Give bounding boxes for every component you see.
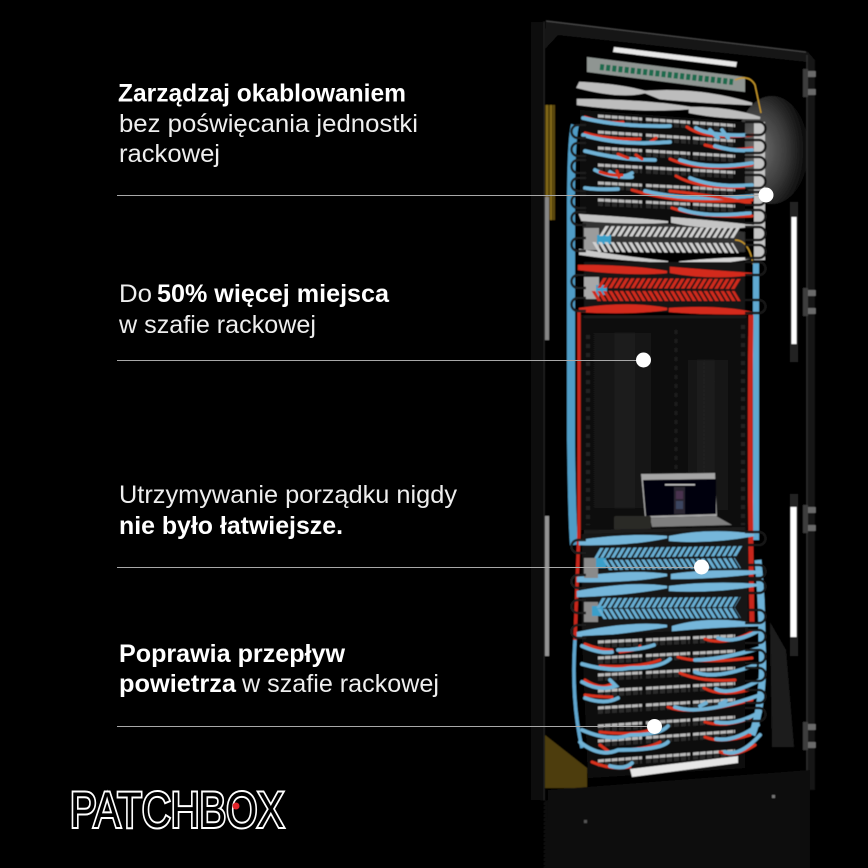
callout 2: more space (117, 280, 651, 368)
black patch panel bodies (580, 110, 745, 225)
yellow cables at back (544, 105, 587, 788)
blue flat bundles (578, 532, 762, 637)
blue cable fans (584, 551, 740, 622)
fibre patch panel (587, 57, 761, 113)
lower door glow (770, 622, 794, 747)
top light bar (613, 47, 737, 67)
text block: rackowej (119, 140, 220, 168)
text block: bez poświęcania jednostki (119, 110, 418, 138)
text block: w szafie rackowej (118, 311, 316, 339)
cabinet plinth (548, 770, 810, 868)
cabinet side panel (450, 20, 548, 868)
bottom light bar (630, 756, 738, 777)
blue bundle backing (582, 530, 748, 636)
text block: Do (119, 280, 152, 308)
text block: powietrza (119, 670, 237, 698)
right light tube lower (790, 494, 798, 656)
upper rack equipment (578, 57, 761, 313)
grey cable fans (580, 215, 755, 265)
tool on shelf (614, 516, 651, 530)
lower rack equipment (578, 530, 762, 778)
text block: 50% więcej miejsca (157, 280, 390, 308)
grey cable bundles (578, 83, 760, 118)
cabinet frame (531, 20, 815, 800)
white strip behind rings (754, 122, 765, 260)
port rows upper (598, 116, 735, 210)
right light tube upper (790, 202, 798, 362)
cable rings right side (745, 122, 766, 721)
callout 3: easy order (117, 481, 709, 574)
empty rack space (581, 315, 747, 530)
logo red dot (232, 802, 240, 810)
text block: Zarządzaj okablowaniem (118, 80, 406, 108)
cabinet interior (545, 22, 810, 800)
door hinges (803, 69, 816, 750)
black lower panel body (582, 628, 745, 778)
callout 1: cable management (117, 80, 774, 202)
callout 4: airflow (117, 640, 662, 734)
vertical cable bundles (571, 125, 763, 748)
text block: Poprawia przepływ (119, 640, 346, 668)
red cable fans (579, 262, 752, 313)
logo: PATCHBOX: PATCHBOX (70, 782, 284, 838)
left light tubes (544, 197, 549, 656)
shelf (584, 527, 745, 535)
port rows lower (598, 636, 735, 765)
text block: nie było łatwiejsze. (119, 512, 343, 540)
server rack cabinet (450, 20, 816, 868)
patch cords upper (583, 117, 753, 216)
text block: Utrzymywanie porządku nigdy (119, 481, 457, 509)
door glow (736, 96, 808, 204)
cable rings left side (572, 125, 586, 638)
patch cords lower (580, 630, 760, 768)
text block: w szafie rackowej (241, 670, 439, 698)
laptop on shelf (641, 473, 732, 527)
